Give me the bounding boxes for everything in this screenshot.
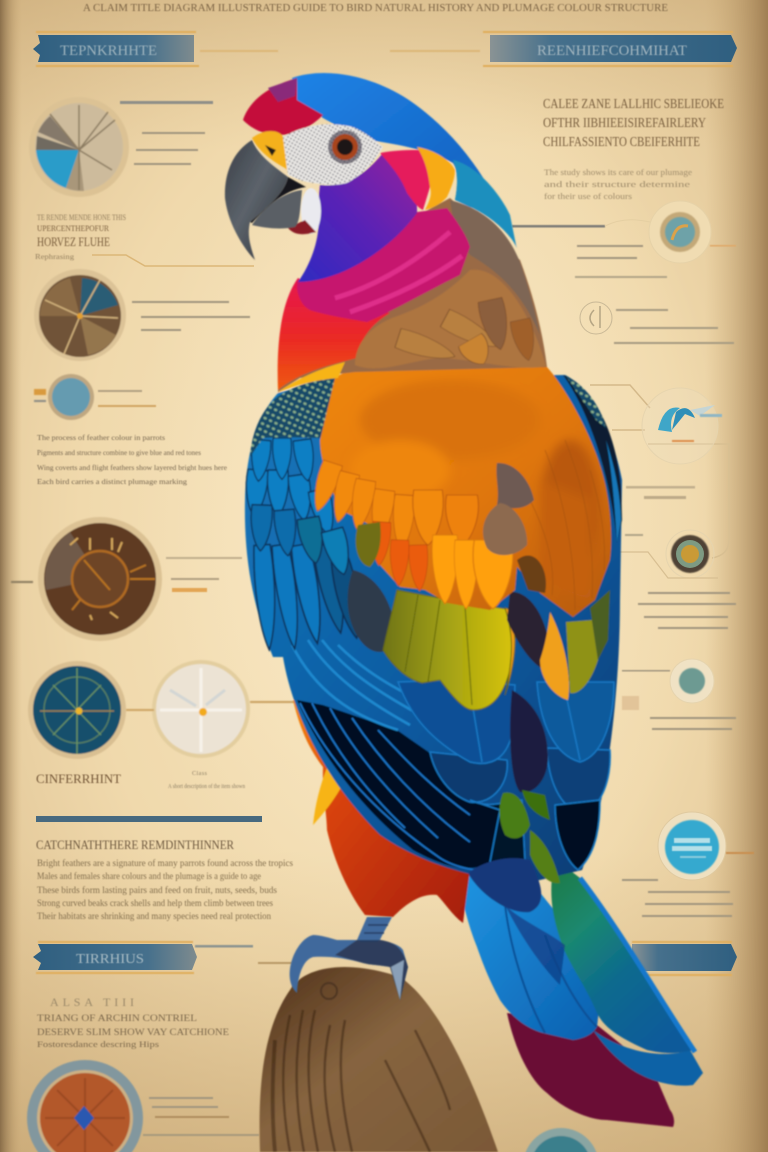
text: dial sub caption: Class (192, 771, 208, 777)
neck: grey-brown nape (450, 200, 540, 335)
back: left orange fan feathers (307, 460, 478, 551)
wing: left scapular feathers (243, 438, 355, 577)
wing: navy tail coverts (468, 858, 541, 912)
neck: base brown (278, 198, 547, 392)
heading and paragraph: lower left: These birds form lasting pairs and feed on fruit, nuts, seeds, buds (37, 885, 278, 895)
text block: right intro: The study shows its care of our plumage (544, 168, 693, 177)
back: upper mantle shading (350, 380, 600, 600)
heading: right column: CHILFASSIENTO CBEIFERHITE (543, 135, 700, 150)
foot: talons (290, 917, 408, 1000)
dial: bottom center teal (523, 1128, 599, 1152)
wing: black lower panel (297, 700, 500, 868)
tail: teal green feather (551, 868, 693, 1053)
callout: right dark dial (616, 530, 736, 629)
head: white face patch (283, 124, 383, 185)
text block: right intro: for their use of colours (544, 192, 632, 201)
heading and paragraph: lower left: Males and females share colours and the plumage is a guide to age (37, 871, 261, 881)
neck: magenta feathers (297, 208, 470, 322)
dial: brown radial chart (34, 269, 126, 361)
dial: small blue (34, 374, 94, 420)
callout: right blue badge (622, 812, 754, 917)
callout: right dial 1 (512, 201, 736, 278)
text: dial sub caption: A short description of the item shown (168, 783, 245, 790)
head: yellow patch (417, 147, 455, 210)
callout: right bird dial (590, 385, 729, 558)
wing: green speckled shoulder (250, 378, 335, 457)
perch: wooden post (260, 967, 498, 1152)
parrot (225, 73, 703, 1127)
text block: left middle paragraph: Pigments and structure combine to give blue and red tones (37, 449, 201, 457)
head: purple cheek (298, 153, 417, 282)
back: right long feathers (530, 440, 604, 610)
text: dial sub caption (168, 771, 245, 790)
ribbon: top left: TEPNKRHHTE (60, 43, 157, 59)
heading and paragraph: lower left: Strong curved beaks crack shells and help them climb between trees (37, 898, 273, 908)
text block: left upper caption: HORVEZ FLUHE (37, 234, 110, 249)
head: teal nape feathers (453, 160, 516, 245)
text block: bottom left: ALSA TIII (50, 995, 134, 1009)
feathers: dark and yellow right band (507, 592, 551, 672)
text block: left middle paragraph: Wing coverts and flight feathers show layered bright hues here (37, 464, 227, 472)
head: red forehead (243, 78, 323, 135)
text block: right intro (544, 168, 693, 201)
wing: main blue (245, 375, 622, 881)
beak: lower mandible (252, 190, 302, 228)
back: red-orange lower feathers (370, 521, 429, 591)
ribbon: top right: REENHIEFCOHMIHAT (537, 43, 687, 59)
belly: orange-red lower body (293, 700, 470, 923)
top title line: A CLAIM TITLE DIAGRAM ILLUSTRATED GUIDE TO BIRD NATURAL HISTORY AND PLUMAGE COLOUR STRUCTURE (83, 2, 668, 14)
tail: lower blue (593, 1030, 703, 1086)
head: eye (328, 130, 362, 164)
wing: lower blue feather rows (398, 680, 614, 870)
heading: right column: CALEE ZANE LALLHIC SBELIEOKE (543, 97, 724, 112)
beak: upper mandible (225, 140, 288, 260)
band: green and yellow feathers (383, 590, 515, 710)
wing: dark centre feather (510, 690, 548, 793)
text block: left middle paragraph (37, 434, 227, 486)
text block: right intro: and their structure determine (544, 180, 691, 189)
heading and paragraph: lower left (36, 837, 293, 921)
heading and paragraph: lower left: CATCHNATHTHERE REMDINTHINNER (36, 837, 234, 852)
text: bottom dial labels (143, 1097, 259, 1136)
heading: right column (543, 97, 724, 150)
text block: bottom left: Fostoresdance descring Hips (37, 1040, 159, 1049)
wing: left long feathers (252, 543, 367, 650)
belly: yellow streak (313, 765, 345, 825)
ribbon: bottom left (33, 941, 292, 974)
callout: right small teal dial (622, 659, 736, 730)
back: bright orange lower feathers (432, 535, 513, 609)
wing: green rump feathers (499, 790, 560, 883)
ribbon: bottom left: TIRRHIUS (76, 952, 144, 967)
dial: dark teal (28, 661, 126, 759)
heading and paragraph: lower left: Their habitats are shrinking and many species need real protection (37, 911, 271, 921)
text: small dial labels (98, 390, 156, 407)
text block: bottom left: TRIANG OF ARCHIN CONTRIEL (37, 1013, 197, 1023)
text block: left middle paragraph: The process of feather colour in parrots (37, 434, 165, 442)
wing: right edge strip (563, 375, 622, 543)
wing: upper thin primaries (292, 640, 430, 730)
text: dial labels (132, 301, 250, 331)
text block: left middle paragraph: Each bird carries a distinct plumage marking (37, 478, 188, 486)
ribbon: bottom right (632, 941, 737, 976)
wing: blue feather lines (300, 703, 500, 872)
beak: yellow cere (252, 131, 287, 170)
callout: right outline icon (580, 302, 734, 344)
head: crown blue (292, 73, 517, 248)
olive feather (356, 522, 381, 567)
beak: white gape (301, 188, 321, 234)
neck: red orange (278, 278, 390, 390)
text block: left upper caption: TE RENDE MENDE HONE THIS (37, 213, 126, 222)
text: large dial labels (166, 557, 242, 592)
divider bar (36, 816, 262, 822)
text block: left upper caption: Rephrasing (35, 253, 75, 261)
wing: dark grey-blue feathers (348, 570, 397, 652)
tail: light blue feather (457, 873, 600, 1040)
text: pie labels (120, 101, 213, 165)
dial: bottom left orange (27, 1060, 143, 1152)
ribbon: top right (390, 31, 737, 67)
heading and paragraph: lower left: Bright feathers are a signature of many parrots found across the tropics (37, 858, 293, 868)
text block: bottom left: DESERVE SLIM SHOW VAY CATCHIONE (37, 1027, 230, 1037)
text block: left upper caption (35, 213, 254, 266)
heading: right column: OFTHR IIBHIEEISIREFAIRLERY (543, 116, 706, 131)
dial: large brown (11, 517, 162, 641)
pie chart: top left (29, 97, 129, 197)
neck: brown shoulder feathers (355, 270, 546, 368)
head: pink patch (380, 150, 431, 210)
text block: left upper caption: UPERCENTHEPOFUR (37, 224, 110, 233)
back: orange mantle (320, 362, 611, 617)
neck: yellow streak (277, 362, 345, 393)
ribbon: top left (33, 31, 278, 67)
label: dial caption: CINFERRHINT (36, 771, 121, 786)
text block: bottom left (37, 995, 230, 1049)
dial: white (126, 660, 300, 758)
back: brown accent feathers (497, 463, 534, 508)
tail: maroon underfeathers (507, 1013, 674, 1127)
